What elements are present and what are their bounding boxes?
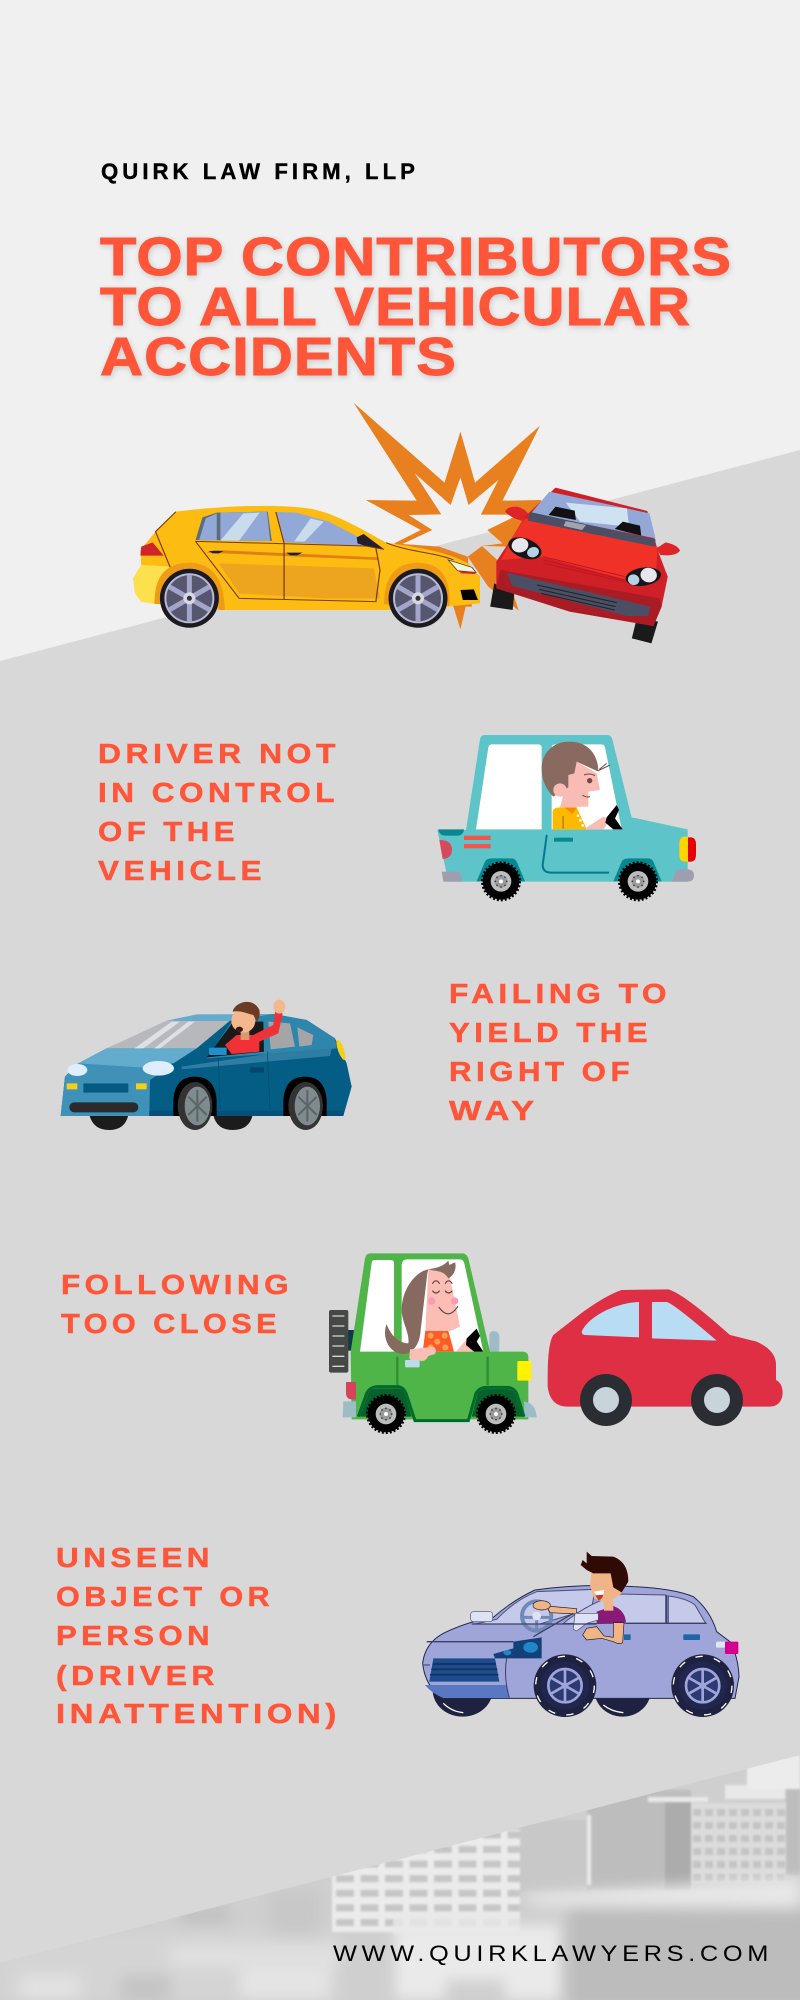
- firm name: QUIRK LAW FIRM, LLP: [101, 159, 419, 184]
- purple car driver: [533, 1552, 628, 1644]
- label: driver not in control: IN CONTROL: [98, 777, 339, 808]
- label: failing to yield: RIGHT OF: [449, 1056, 634, 1087]
- title: TOP CONTRIBUTORS: [100, 227, 732, 287]
- crash starburst: [353, 403, 541, 629]
- spare tire: [329, 1310, 355, 1373]
- title: ACCIDENTS: [100, 327, 457, 387]
- background: grey diagonal panel: [0, 450, 800, 2000]
- illustration: teal car with driver: [437, 735, 696, 900]
- title: [100, 227, 732, 387]
- red car: [490, 488, 680, 643]
- label: driver not in control: DRIVER NOT: [98, 738, 340, 769]
- label: following too close: TOO CLOSE: [61, 1308, 281, 1339]
- label: failing to yield: [449, 978, 671, 1126]
- label: unseen object or person: PERSON: [56, 1620, 214, 1651]
- title: TO ALL VEHICULAR: [100, 277, 691, 337]
- label: driver not in control: OF THE: [98, 816, 239, 847]
- label: failing to yield: FAILING TO: [449, 978, 671, 1009]
- label: unseen object or person: (DRIVER: [56, 1660, 219, 1691]
- label: following too close: FOLLOWING: [61, 1269, 293, 1300]
- blue car driver: [225, 1000, 285, 1054]
- label: failing to yield: WAY: [449, 1095, 539, 1126]
- red car: [548, 1289, 783, 1426]
- green car: [343, 1253, 537, 1433]
- label: driver not in control: [98, 738, 340, 886]
- illustration: blue car with waving driver: [61, 1000, 352, 1130]
- label: following too close: [61, 1269, 293, 1339]
- label: unseen object or person: OBJECT OR: [56, 1581, 274, 1612]
- label: unseen object or person: [56, 1542, 341, 1729]
- label: driver not in control: VEHICLE: [98, 855, 266, 886]
- label: unseen object or person: UNSEEN: [56, 1542, 214, 1573]
- illustration: green car tailgating red car: [329, 1253, 783, 1433]
- website url: WWW.QUIRKLAWYERS.COM: [333, 1941, 773, 1966]
- yellow car wheels: [160, 569, 448, 628]
- illustration: car crash: [133, 403, 680, 643]
- illustration: purple car with distracted driver: [423, 1552, 739, 1717]
- yellow car: [133, 506, 480, 628]
- label: failing to yield: YIELD THE: [449, 1017, 652, 1048]
- city photo strip at bottom: [0, 1750, 800, 2000]
- label: unseen object or person: INATTENTION): [56, 1698, 341, 1729]
